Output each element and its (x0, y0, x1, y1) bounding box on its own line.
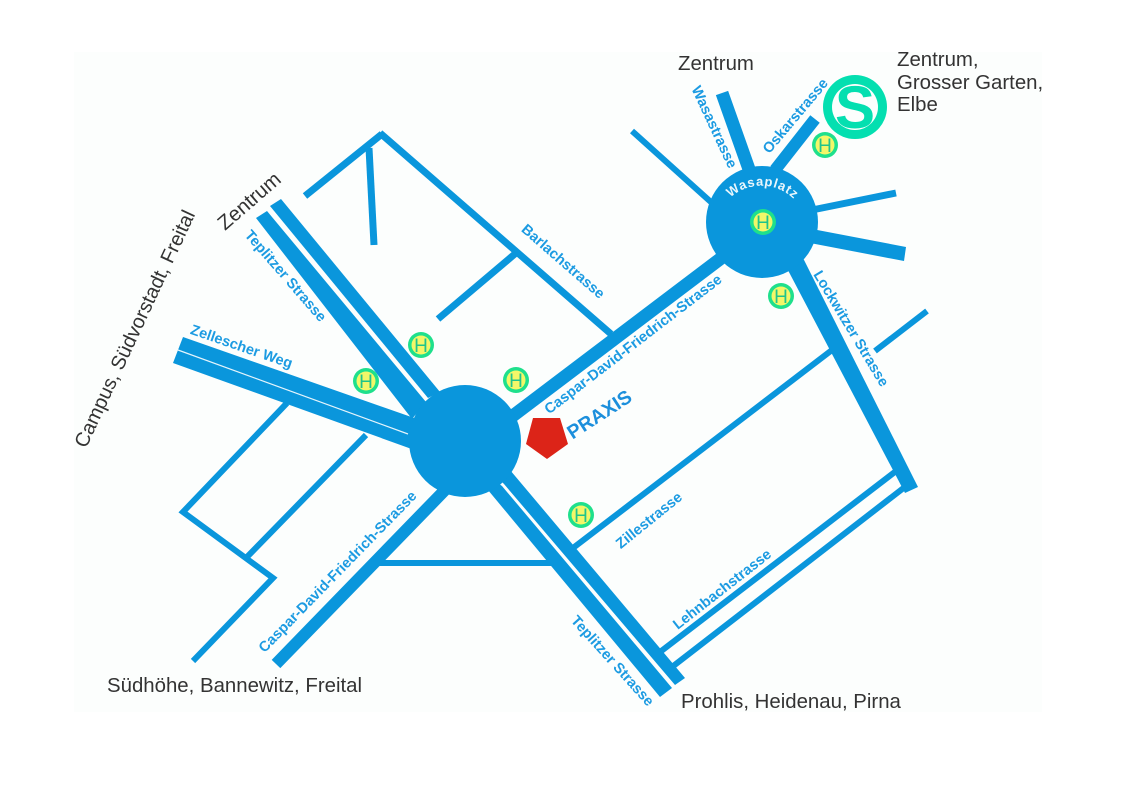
label: Barlachstrasse: Barlachstrasse (518, 222, 607, 302)
label: Caspar-David-Friedrich-Strasse north: Caspar-David-Friedrich-Strasse (542, 272, 725, 418)
road: Lehnbachstrasse (660, 468, 910, 667)
S-Bahn icon (823, 74, 887, 141)
road: Wasastrasse (722, 93, 750, 172)
label: Teplitzer Strasse south: Teplitzer Strasse (567, 613, 657, 710)
road: Caspar-David-Friedrich-Strasse north (510, 253, 728, 418)
label: Zillestrasse: Zillestrasse (613, 489, 686, 552)
bus stop near Zellescher Weg: H (359, 372, 373, 393)
road: side street east of Lockwitzer Strasse (875, 311, 927, 351)
roundabout: main junction (409, 385, 521, 497)
road: Teplitzer Strasse north carriageways (256, 199, 440, 419)
bus stop near Zellescher Weg (353, 368, 379, 394)
destination: Zentrum north: Zentrum (678, 53, 754, 75)
destination: Zentrum, Grosser Garten, Elbe: Elbe (897, 94, 938, 116)
label: PRAXIS: PRAXIS (563, 386, 636, 444)
road: Oskarstrasse (775, 119, 815, 170)
road: Lockwitzer Strasse (780, 252, 918, 493)
destination: Zentrum, Grosser Garten, Elbe: Grosser Garten, (897, 72, 1043, 94)
bus stop near Teplitzer Strasse: H (414, 336, 428, 357)
destination: Campus, Südvorstadt, Freital: Campus, Südvorstadt, Freital (71, 207, 200, 451)
label: Caspar-David-Friedrich-Strasse south: Caspar-David-Friedrich-Strasse (256, 488, 420, 656)
label: Lockwitzer Strasse: Lockwitzer Strasse (810, 268, 891, 390)
label: Zellescher Weg: Zellescher Weg (188, 322, 294, 372)
road: Teplitzer Strasse south carriageways (478, 464, 685, 697)
destination: Südhöhe, Bannewitz, Freital: Südhöhe, Bannewitz, Freital (107, 675, 362, 697)
road: Zellescher Weg (173, 337, 420, 452)
bus stop near Lockwitzer Strasse: H (774, 287, 788, 308)
label: Wasastrasse: Wasastrasse (688, 84, 740, 171)
bus stop near Caspar-David-Friedrich-Strasse: H (509, 371, 523, 392)
label: Teplitzer Strasse north: Teplitzer Strasse (241, 227, 329, 325)
road: Barlachstrasse and side streets (305, 133, 611, 334)
label: Lehnbachstrasse: Lehnbachstrasse (670, 547, 775, 633)
bus stop on Wasaplatz (750, 209, 776, 235)
road: streets around Wasaplatz (632, 131, 906, 261)
bus stop near Zillestrasse (568, 502, 594, 528)
label: Wasaplatz: Wasaplatz (725, 178, 798, 198)
bus stop near Oskarstrasse: H (818, 136, 832, 157)
destination: Prohlis, Heidenau, Pirna: Prohlis, Heidenau, Pirna (681, 691, 902, 713)
bus stop near Zillestrasse: H (574, 506, 588, 527)
bus stop near Caspar-David-Friedrich-Strasse (503, 367, 529, 393)
bus stop near Oskarstrasse (812, 132, 838, 158)
road: Zillestrasse (573, 350, 832, 548)
roundabout: Wasaplatz (706, 166, 818, 278)
road: Caspar-David-Friedrich-Strasse south (276, 490, 445, 664)
PRAXIS marker (526, 418, 568, 459)
bus stop near Teplitzer Strasse (408, 332, 434, 358)
bus stop icons (353, 132, 838, 528)
road network (173, 93, 927, 697)
road: streets south-west (183, 403, 553, 661)
bus stop on Wasaplatz: H (756, 213, 770, 234)
destination: Zentrum, Grosser Garten, Elbe: Zentrum, (897, 49, 979, 71)
label: Oskarstrasse: Oskarstrasse (760, 76, 832, 157)
map background panel (74, 52, 1042, 712)
S-Bahn icon: S (835, 74, 875, 141)
destination: Zentrum north-west: Zentrum (214, 168, 286, 235)
bus stop near Lockwitzer Strasse (768, 283, 794, 309)
